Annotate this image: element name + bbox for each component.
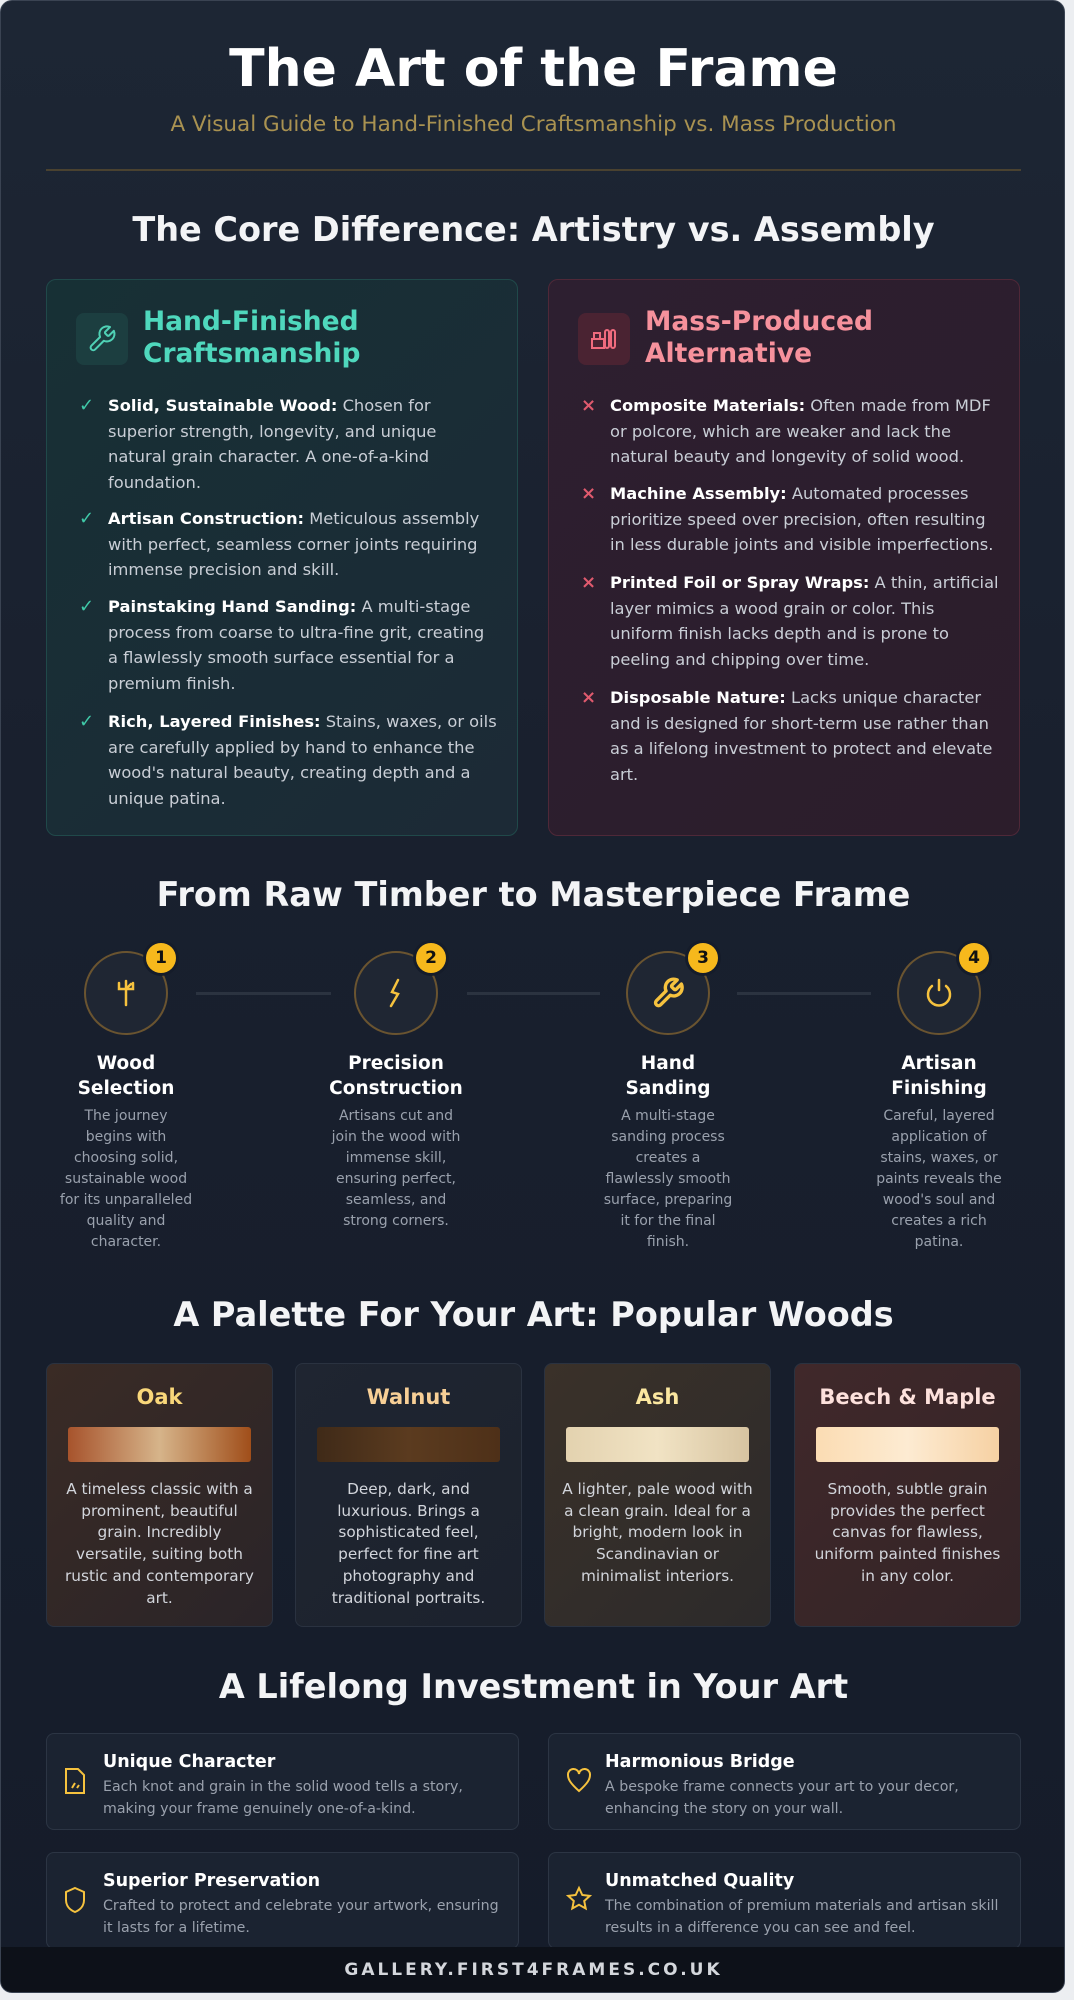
bullet 1: Solid, Sustainable Wood: Chosen for superior strength, longevity, and unique natural grain character. A one-of-a-kind foundation. — [108, 396, 436, 492]
heading: woods: A Palette For Your Art: Popular Woods — [173, 1295, 894, 1334]
benefit: harmonious bridge: A bespoke frame connects your art to your decor, enhancing the story on your wall. — [605, 1779, 959, 1816]
main card: choosing solid, — [74, 1150, 178, 1166]
icon: heart — [567, 1768, 591, 1792]
main card: Artisan — [901, 1053, 977, 1074]
benefit: superior preservation — [46, 1852, 519, 1949]
main card: sanding process — [611, 1129, 725, 1145]
panel: hand-finished: ✓ — [79, 596, 94, 617]
main card: stains, waxes, or — [880, 1150, 998, 1166]
panel: hand-finished: ✓ — [79, 395, 94, 416]
benefit: unique character — [46, 1733, 519, 1830]
panel: mass-produced: × — [581, 572, 596, 593]
wood card: beech & maple: Smooth, subtle grain provides the perfect canvas for flawless, uniform painted finishes in any color. — [815, 1480, 1000, 1585]
panel heading: Mass-Produced — [645, 306, 873, 337]
panel heading — [143, 306, 360, 369]
icon: document — [65, 1768, 85, 1794]
main card: ensuring perfect, — [336, 1171, 456, 1187]
panel: mass-produced: × — [581, 687, 596, 708]
wood card: ash — [544, 1363, 771, 1627]
panel heading: Alternative — [645, 338, 812, 369]
main card: Careful, layered — [883, 1108, 995, 1124]
bullet 2: Machine Assembly: Automated processes prioritize speed over precision, often resulting in less durable joints and visible imperfections. — [610, 484, 993, 554]
wood card: oak — [46, 1363, 273, 1627]
main card: Finishing — [891, 1078, 987, 1099]
benefit: superior preservation: Superior Preservation — [103, 1871, 320, 1891]
wood card: ash: Ash — [636, 1385, 679, 1409]
main card: immense skill, — [346, 1150, 446, 1166]
wood card: walnut: Deep, dark, and luxurious. Brings a sophisticated feel, perfect for fine art photography and traditional portraits. — [332, 1480, 485, 1607]
main card: Artisans cut and — [339, 1108, 453, 1124]
main card: wood's soul and — [883, 1192, 995, 1208]
icon: wrench — [76, 313, 128, 365]
main card: patina. — [915, 1234, 963, 1250]
benefit: harmonious bridge — [548, 1733, 1021, 1830]
main card: 1 — [155, 948, 167, 968]
footer: GALLERY.FIRST4FRAMES.CO.UK — [344, 1960, 723, 1980]
heading: core difference: The Core Difference: Artistry vs. Assembly — [132, 210, 935, 249]
panel: mass-produced: × — [581, 483, 596, 504]
wood card: walnut — [295, 1363, 522, 1627]
bullet 1: Composite Materials: Often made from MDF or polcore, which are weaker and lack the natural beauty and longevity of solid wood. — [610, 396, 991, 466]
main card: finish. — [647, 1234, 689, 1250]
main card: Hand — [641, 1053, 695, 1074]
panel: mass-produced — [548, 279, 1020, 836]
panel: hand-finished — [46, 279, 518, 836]
benefit: unmatched quality: The combination of premium materials and artisan skill results in a difference you can see and feel. — [605, 1898, 998, 1936]
main card: seamless, and — [346, 1192, 446, 1208]
step 1 — [60, 943, 192, 1250]
main card: 3 — [697, 948, 709, 968]
main card: flawlessly smooth — [606, 1171, 730, 1187]
main card: Sanding — [626, 1078, 710, 1099]
main card: Precision — [348, 1053, 444, 1074]
wood card: beech & maple: Beech & Maple — [819, 1385, 996, 1409]
step 2 — [329, 943, 463, 1229]
heading: investment: A Lifelong Investment in Your Art — [219, 1667, 848, 1706]
benefit: unique character: Each knot and grain in the solid wood tells a story, making your frame genuinely one-of-a-kind. — [103, 1779, 463, 1816]
wood card: ash: A lighter, pale wood with a clean grain. Ideal for a bright, modern look in Scandinavian or minimalist interiors. — [562, 1480, 753, 1585]
main card: creates a — [636, 1150, 700, 1166]
main card: it for the final — [620, 1213, 716, 1229]
bullet 3: Printed Foil or Spray Wraps: A thin, artificial layer mimics a wood grain or color. This uniform finish lacks depth and is prone to peeling and chipping over time. — [610, 573, 999, 668]
icon: star — [566, 1886, 592, 1910]
main card: 4 — [968, 948, 980, 968]
main card: Construction — [329, 1078, 463, 1099]
panel heading — [645, 306, 873, 369]
benefit: harmonious bridge: Harmonious Bridge — [605, 1752, 795, 1772]
step 4 — [876, 943, 1002, 1250]
main card: 2 — [425, 948, 437, 968]
main card: join the wood with — [332, 1129, 460, 1145]
benefit: unique character: Unique Character — [103, 1752, 275, 1772]
heading: process: From Raw Timber to Masterpiece Frame — [157, 875, 910, 914]
main card: The journey — [84, 1108, 168, 1124]
wood card: walnut: Walnut — [367, 1385, 450, 1409]
main card: for its unparalleled — [60, 1192, 192, 1208]
panel heading: Hand-Finished — [143, 306, 359, 337]
benefit: unmatched quality — [548, 1852, 1021, 1949]
panel: hand-finished: ✓ — [79, 508, 94, 529]
main card: quality and — [87, 1213, 165, 1229]
icon: shield — [65, 1886, 85, 1914]
wood card: oak: Oak — [136, 1385, 182, 1409]
bullet 3: Painstaking Hand Sanding: A multi-stage process from coarse to ultra-fine grit, creating a flawlessly smooth surface essential for a premium finish. — [108, 597, 484, 692]
wood card: beech & maple — [794, 1363, 1021, 1627]
main card: character. — [91, 1234, 161, 1250]
main card: A multi-stage — [621, 1108, 715, 1124]
panel: mass-produced: × — [581, 395, 596, 416]
main card: strong corners. — [343, 1213, 449, 1229]
subtitle: A Visual Guide to Hand-Finished Craftsmanship vs. Mass Production — [170, 112, 897, 137]
benefit: superior preservation: Crafted to protect and celebrate your artwork, ensuring it lasts for a lifetime. — [103, 1898, 499, 1936]
main card: creates a rich — [891, 1213, 987, 1229]
title: The Art of the Frame — [229, 39, 838, 99]
icon: factory — [578, 313, 630, 365]
wood card: oak: A timeless classic with a prominent, beautiful grain. Incredibly versatile, suiting both rustic and contemporary art. — [65, 1480, 254, 1607]
panel heading: Craftsmanship — [143, 338, 360, 369]
main card: sustainable wood — [65, 1171, 187, 1187]
step 3 — [604, 943, 732, 1250]
main card: paints reveals the — [876, 1171, 1002, 1187]
main card: Wood — [97, 1053, 155, 1074]
bullet 4: Rich, Layered Finishes: Stains, waxes, or oils are carefully applied by hand to enhance the wood's natural beauty, creating depth and a unique patina. — [108, 712, 497, 808]
main card: Selection — [78, 1078, 174, 1099]
main card: surface, preparing — [604, 1192, 732, 1208]
footer — [1, 1947, 1066, 1994]
bullet 4: Disposable Nature: Lacks unique character and is designed for short-term use rather than as a lifelong investment to protect and elevate art. — [610, 688, 992, 784]
panel: hand-finished: ✓ — [79, 711, 94, 732]
main card: begins with — [86, 1129, 166, 1145]
main card: application of — [891, 1129, 987, 1145]
benefit: unmatched quality: Unmatched Quality — [605, 1871, 794, 1891]
bullet 2: Artisan Construction: Meticulous assembly with perfect, seamless corner joints requiring immense precision and skill. — [108, 509, 479, 579]
